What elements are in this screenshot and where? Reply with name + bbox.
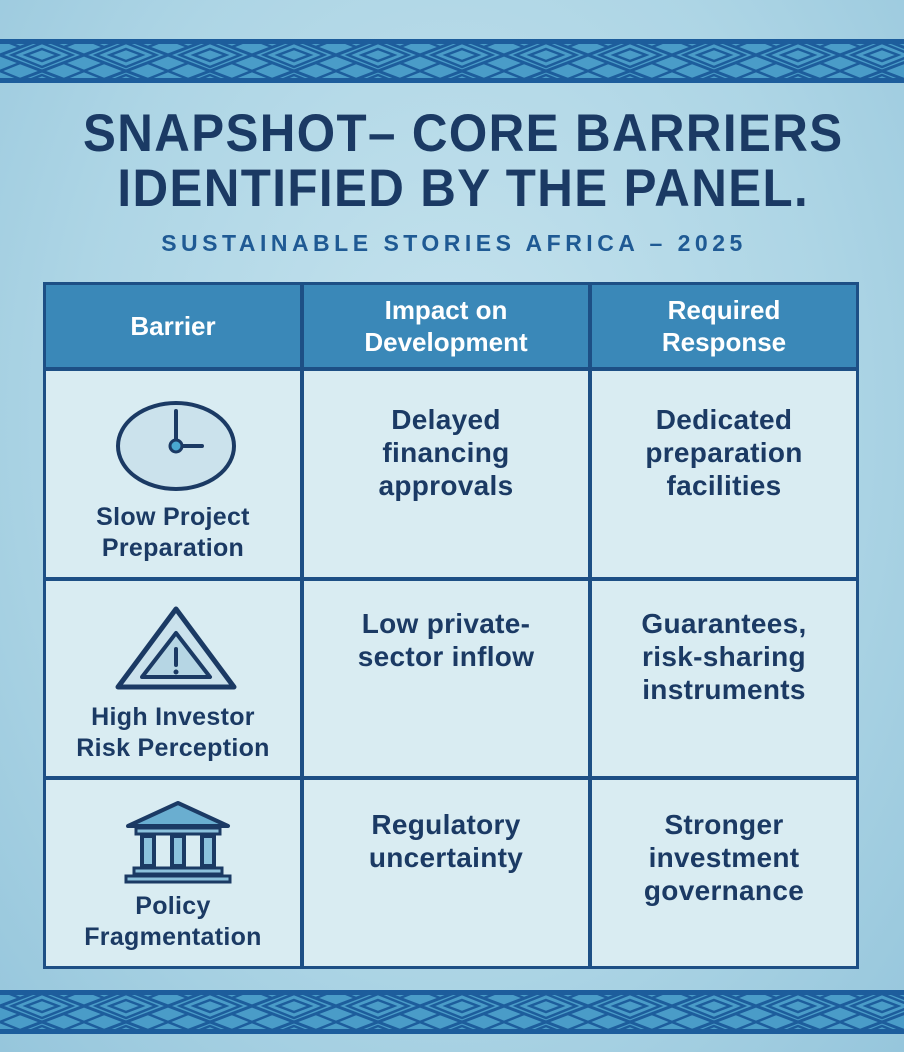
row 3 response xyxy=(592,780,856,966)
header: Impact: Development xyxy=(364,327,528,357)
icon: clock xyxy=(116,401,236,491)
title xyxy=(83,104,844,218)
row 1 impact xyxy=(304,371,588,577)
row 1 response: facilities xyxy=(666,470,782,501)
row 1 barrier: Preparation xyxy=(102,534,244,562)
icon: institution xyxy=(124,801,232,884)
row 2 response: instruments xyxy=(642,674,806,705)
row 2 response: risk-sharing xyxy=(642,641,806,672)
row 1 impact: financing xyxy=(382,437,510,468)
row 2 impact: Low private- xyxy=(362,608,530,639)
row 3 impact xyxy=(304,780,588,966)
row 3 impact: Regulatory xyxy=(371,809,521,840)
row 2 response: Guarantees, xyxy=(641,608,807,639)
row 2 barrier: High Investor xyxy=(91,703,255,731)
title: SNAPSHOT– CORE BARRIERS xyxy=(83,104,844,163)
row 2 impact: sector inflow xyxy=(358,641,534,672)
top decorative band xyxy=(0,39,904,83)
row 3 response: governance xyxy=(644,875,804,906)
row 2 barrier: Risk Perception xyxy=(76,734,270,762)
row 1 impact: Delayed xyxy=(391,404,501,435)
row 3 impact: uncertainty xyxy=(369,842,523,873)
row 2 impact xyxy=(304,581,588,776)
row 3 barrier xyxy=(46,780,300,966)
row 1 response: Dedicated xyxy=(656,404,792,435)
table xyxy=(43,282,859,969)
bottom decorative band xyxy=(0,990,904,1034)
row 3 barrier: Policy xyxy=(135,892,211,920)
row 1 response: preparation xyxy=(645,437,803,468)
row 3 response: investment xyxy=(649,842,799,873)
header: Impact xyxy=(304,285,588,367)
header: Impact: Impact on xyxy=(385,295,507,325)
row 3 response: Stronger xyxy=(664,809,784,840)
header: Response: Response xyxy=(662,327,786,357)
row 1 barrier xyxy=(46,371,300,577)
header: Barrier: Barrier xyxy=(130,311,216,341)
row 1 barrier: Slow Project xyxy=(96,503,250,531)
row 1 impact: approvals xyxy=(378,470,513,501)
row 2 barrier xyxy=(46,581,300,776)
header: Barrier xyxy=(46,285,300,367)
row 1 response xyxy=(592,371,856,577)
icon: warning xyxy=(116,606,236,690)
header: Response: Required xyxy=(668,295,780,325)
title: IDENTIFIED BY THE PANEL. xyxy=(117,159,809,218)
header: Response xyxy=(592,285,856,367)
row 3 barrier: Fragmentation xyxy=(84,923,262,951)
row 2 response xyxy=(592,581,856,776)
subtitle: SUSTAINABLE STORIES AFRICA – 2025 xyxy=(161,230,747,256)
